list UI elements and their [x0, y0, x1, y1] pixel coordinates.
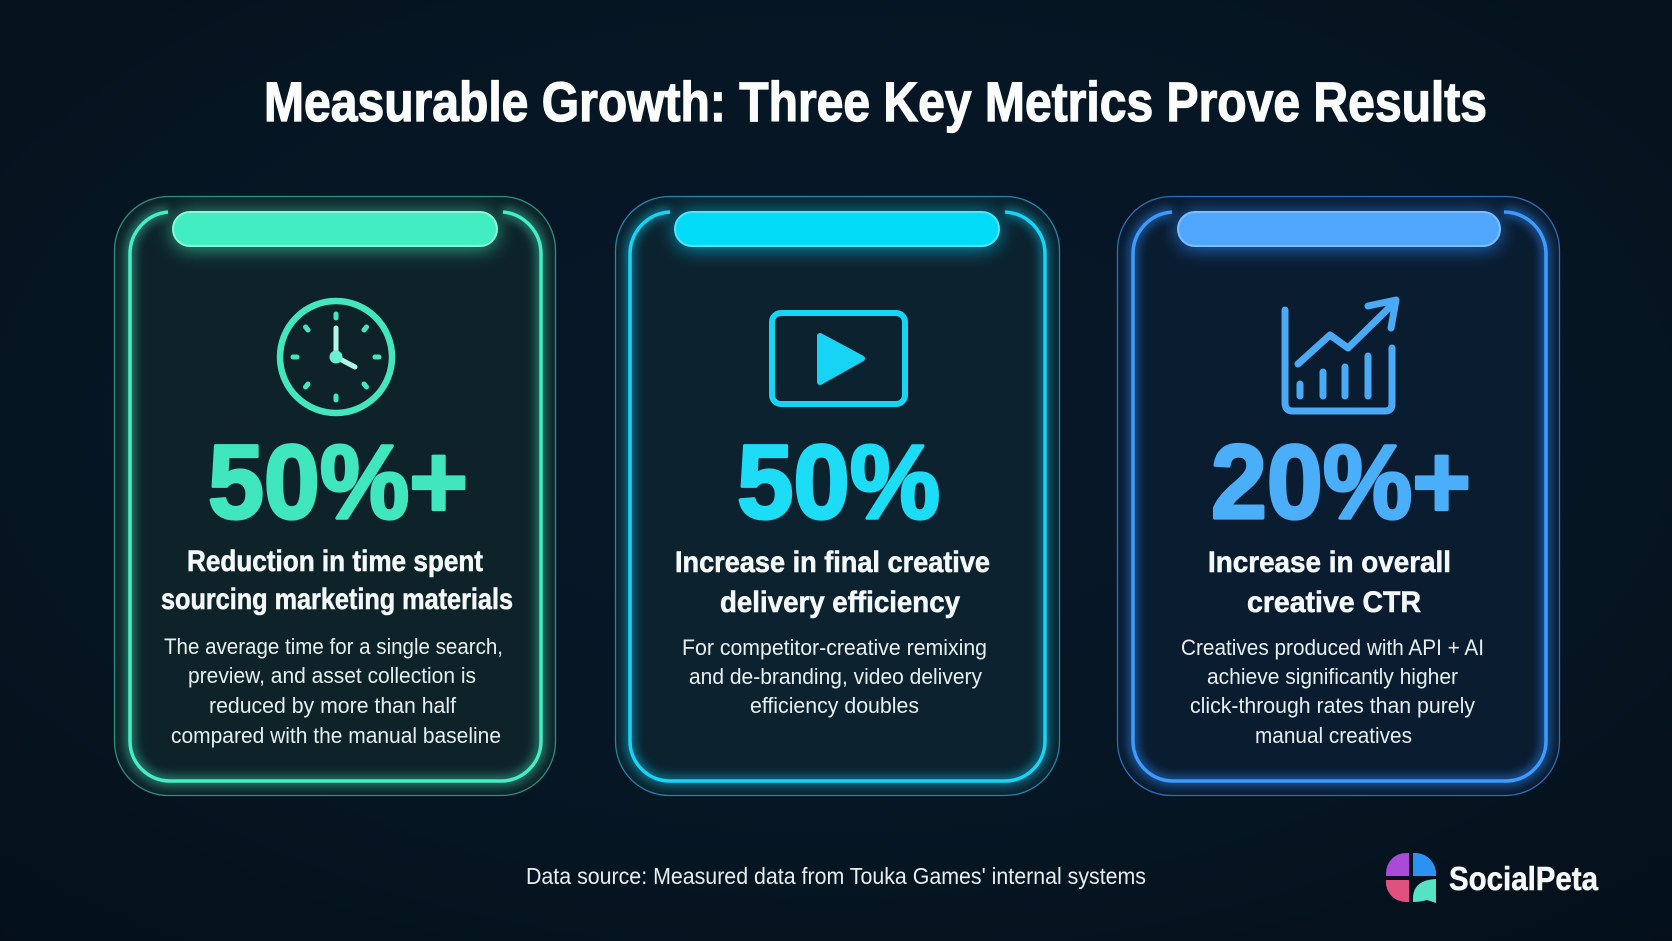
logo mark — [1386, 853, 1436, 903]
accent bar — [1178, 212, 1500, 246]
label: creative CTR — [1247, 586, 1421, 619]
label: Increase in overall — [1208, 546, 1451, 579]
data source note: Data source: Measured data from Touka Games' internal systems — [526, 863, 1146, 889]
description: compared with the manual baseline — [171, 723, 501, 748]
description: click-through rates than purely — [1190, 693, 1476, 718]
accent bar — [675, 212, 999, 246]
label: Increase in final creative — [675, 546, 990, 579]
label: sourcing marketing materials — [161, 583, 513, 616]
description — [164, 634, 503, 748]
description: For competitor-creative remixing — [682, 635, 987, 660]
label — [1208, 546, 1451, 619]
description: Creatives produced with API + AI — [1181, 635, 1484, 660]
description: achieve significantly higher — [1207, 664, 1458, 689]
stat: 50%: 50% — [737, 424, 940, 541]
description: reduced by more than half — [209, 693, 457, 718]
icon: clock — [280, 301, 392, 413]
label: Reduction in time spent — [187, 545, 483, 578]
label — [161, 545, 513, 616]
panel: creative CTR — [1118, 196, 1560, 796]
description — [682, 635, 987, 718]
logo wordmark: SocialPeta — [1449, 860, 1599, 897]
logo: SocialPeta — [1386, 853, 1599, 903]
accent bar — [173, 212, 497, 246]
description: preview, and asset collection is — [188, 663, 476, 688]
label — [675, 546, 990, 619]
title: Measurable Growth: Three Key Metrics Prove Results — [264, 70, 1487, 133]
panel: delivery efficiency — [616, 196, 1060, 796]
description: manual creatives — [1255, 723, 1412, 748]
description: efficiency doubles — [750, 693, 919, 718]
panel: time reduction — [114, 196, 556, 796]
label: delivery efficiency — [720, 586, 960, 619]
description: and de-branding, video delivery — [689, 664, 983, 689]
stat: 50%+: 50%+ — [208, 424, 468, 541]
icon: video play — [772, 313, 905, 404]
description — [1181, 635, 1484, 748]
stat: 20%+: 20%+ — [1211, 424, 1471, 541]
icon: growth chart — [1285, 300, 1396, 411]
description: The average time for a single search, — [164, 634, 503, 659]
